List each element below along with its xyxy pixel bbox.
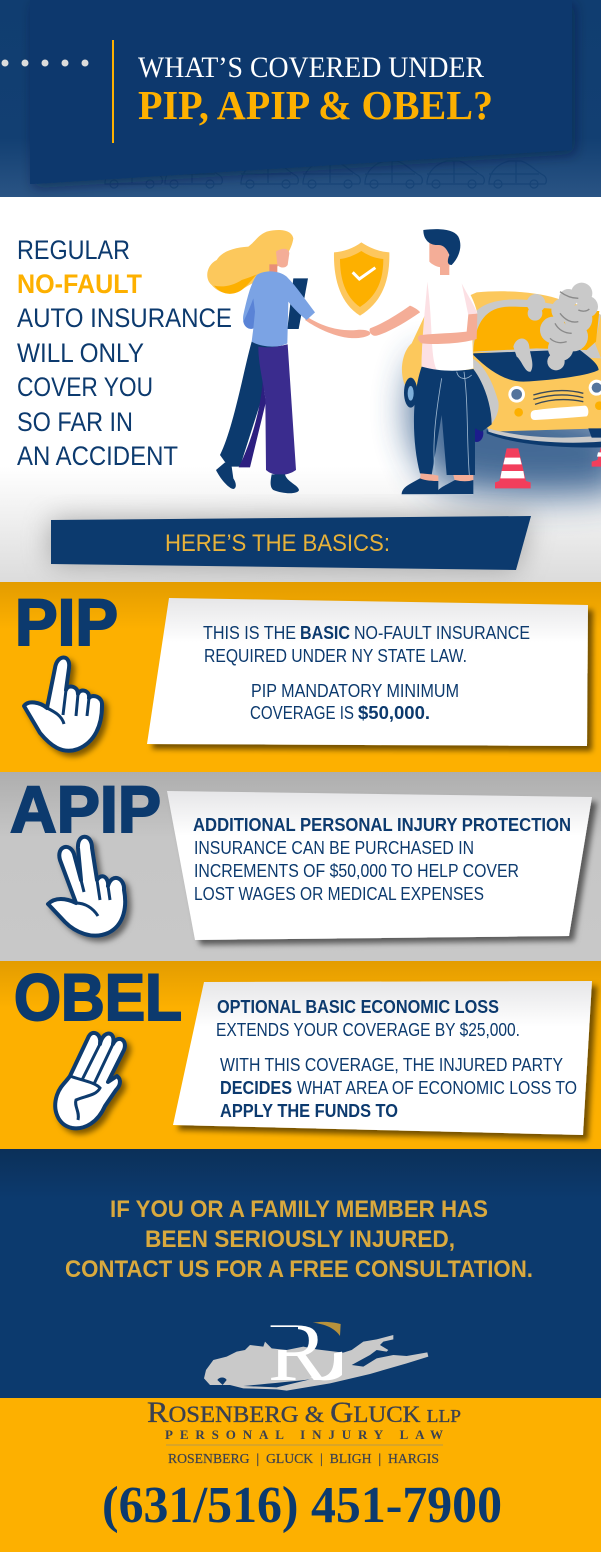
call to action text: BEEN SERIOUSLY INJURED, [145,1226,455,1253]
intro text: COVER YOU [17,372,153,402]
OBEL card text: APPLY THE FUNDS TO [220,1101,398,1121]
OBEL card text: EXTENDS YOUR COVERAGE BY $25,000. [216,1020,520,1040]
panel: firm footer [0,1396,601,1552]
woman trousers [220,342,287,467]
woman hair [207,230,293,294]
PIP card text: PIP MANDATORY MINIMUM [251,681,459,701]
intro section [0,197,601,582]
title: WHAT’S COVERED UNDER [138,51,484,84]
panel: call to action [0,1149,601,1399]
man shirt [422,276,477,371]
PIP card text: THIS IS THE [203,623,296,643]
PIP card text: $50,000. [358,703,430,723]
header band [0,0,601,197]
call to action text: IF YOU OR A FAMILY MEMBER HAS [110,1196,488,1223]
yellow car [402,291,601,447]
logo: Long Island map with RG monogram [204,1322,428,1391]
OBEL heading: OBEL [14,960,182,1034]
PIP heading: PIP [15,585,118,659]
basics banner [51,516,531,570]
panel: OBEL [0,960,601,1149]
intro text [17,235,232,471]
partner names: ROSENBERG | GLUCK | BLIGH | HARGIS [168,1452,439,1467]
five dots [2,60,88,66]
man jeans [414,367,492,475]
PIP card [147,598,588,746]
OBEL card [173,981,592,1135]
road shadow [409,355,601,496]
header car silhouettes [105,161,546,188]
title: PIP, APIP & OBEL? [138,82,493,128]
man arm handshake [370,306,420,336]
call to action text: CONTACT US FOR A FREE CONSULTATION. [65,1256,533,1283]
header panel [30,0,572,184]
woman shoes [216,462,236,489]
shield [334,242,389,316]
PIP card text [203,623,530,723]
OBEL card text [216,997,577,1121]
traffic cone left [495,448,531,488]
man hair [423,229,460,265]
panel: APIP [0,772,601,961]
icon: two finger hand [48,837,125,936]
APIP card text: INSURANCE CAN BE PURCHASED IN [194,838,474,858]
title [138,51,493,128]
logo: Long Island map with RG monogram: R [268,1306,328,1399]
APIP card text [193,815,571,904]
APIP card [167,791,592,940]
intro text: REGULAR [17,235,130,265]
PIP card text: REQUIRED UNDER NY STATE LAW. [204,646,467,666]
APIP card text: INCREMENTS OF $50,000 TO HELP COVER [194,861,519,881]
man ankles [420,473,473,482]
basics banner: HERE’S THE BASICS: [165,530,390,557]
man head [429,242,449,267]
APIP card text: ADDITIONAL PERSONAL INJURY PROTECTION [193,815,571,835]
OBEL card text: OPTIONAL BASIC ECONOMIC LOSS [217,997,499,1017]
smoke [513,283,598,372]
PIP card text: NO-FAULT INSURANCE [354,623,530,643]
icon: one finger hand [24,658,102,751]
clipboard [287,278,308,329]
APIP card text: LOST WAGES OR MEDICAL EXPENSES [194,884,484,904]
intro text: NO-FAULT [17,269,142,299]
tagline: PERSONAL INJURY LAW [165,1427,443,1442]
intro text: AUTO INSURANCE [17,303,232,333]
traffic cone right [592,447,601,467]
icon: three finger hand [55,1033,125,1128]
gold vertical rule [112,40,114,143]
woman arm [305,317,370,338]
OBEL card text: DECIDES [220,1078,292,1098]
man [370,229,492,495]
firm name: ROSENBERG & GLUCK LLP [147,1396,461,1429]
phone number: (631/516) 451-7900 [102,1477,502,1534]
woman [207,230,370,493]
OBEL card text: WITH THIS COVERAGE, THE INJURED PARTY [220,1055,563,1075]
man shoes [402,478,438,494]
intro text: WILL ONLY [17,338,144,368]
PIP card text: COVERAGE IS [250,703,354,723]
man forearm [418,314,477,344]
APIP heading: APIP [10,772,161,846]
intro text: AN ACCIDENT [17,441,178,471]
illustration: handshake and broken-down car [207,229,601,496]
woman shirt [243,271,315,347]
PIP card text: BASIC [300,623,350,643]
panel: PIP [0,582,601,772]
intro text: SO FAR IN [17,407,133,437]
call to action text [65,1196,533,1283]
